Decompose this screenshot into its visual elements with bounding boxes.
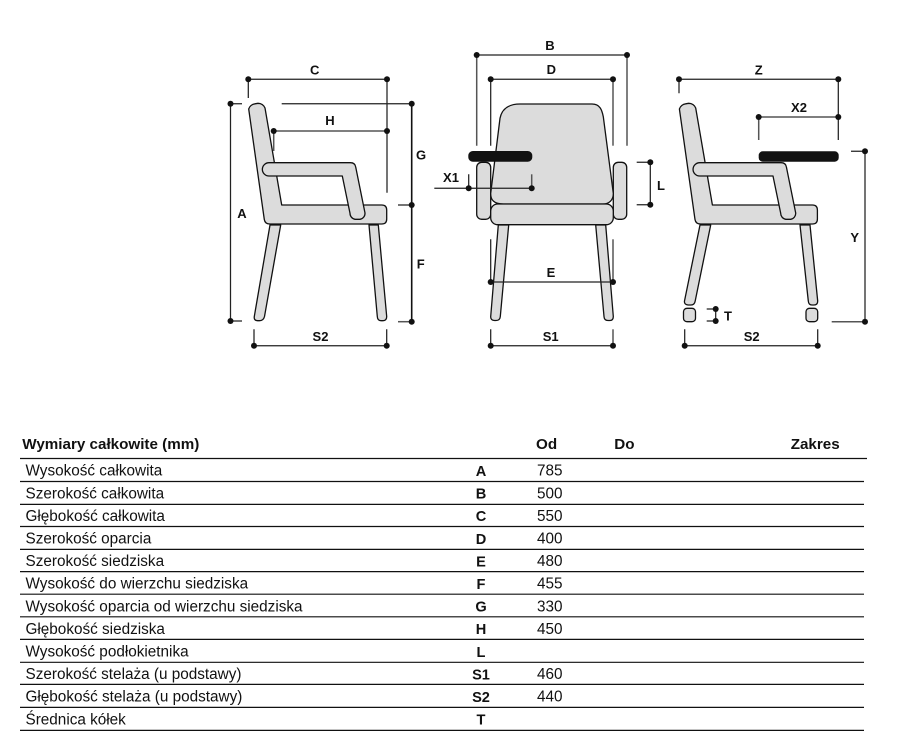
- dimensions G and F: G: [416, 148, 426, 162]
- dimension A: [228, 101, 247, 324]
- dimension Y: Y: [850, 230, 859, 245]
- writing tablet: side view: [759, 151, 839, 162]
- dimension C: [245, 62, 390, 193]
- front view chair diagram: [434, 38, 665, 349]
- row F: F: [477, 577, 486, 593]
- row E: 480: [537, 553, 563, 570]
- table header: Wymiary całkowite (mm): [22, 436, 199, 453]
- dimension B: [474, 38, 630, 146]
- row F: [20, 576, 864, 594]
- row S1: 460: [537, 666, 563, 683]
- row L: Wysokość podłokietnika: [26, 644, 189, 660]
- row A: 785: [537, 463, 563, 480]
- writing tablet: front view: [468, 151, 532, 162]
- dimension S1: [488, 329, 616, 349]
- row E: Szerokość siedziska: [26, 553, 165, 570]
- row B: 500: [537, 485, 563, 502]
- row D: 400: [537, 530, 563, 548]
- row H: H: [476, 622, 486, 638]
- dimension X1: [434, 170, 535, 191]
- row F: Wysokość do wierzchu siedziska: [26, 576, 249, 593]
- dimension S2: [682, 329, 821, 349]
- dimension B: B: [545, 38, 555, 53]
- dimension S1: S1: [543, 329, 559, 344]
- chair: side view: [249, 103, 387, 321]
- row T: T: [477, 713, 486, 729]
- dimension D: D: [547, 62, 556, 77]
- row S2: [20, 689, 864, 707]
- table header: Zakres: [791, 436, 840, 453]
- row G: 330: [537, 598, 563, 615]
- row H: [20, 621, 864, 639]
- dimension L: L: [657, 178, 665, 193]
- row A: [20, 463, 864, 482]
- row D: [20, 530, 864, 549]
- chair: side view with casters: [679, 103, 818, 322]
- dimensions G and F: F: [417, 256, 425, 272]
- row A: A: [476, 464, 487, 480]
- row S2: Głębokość stelaża (u podstawy): [26, 689, 242, 706]
- dimension X1: X1: [443, 170, 459, 185]
- row C: C: [476, 509, 487, 525]
- dimension T: T: [724, 308, 732, 324]
- row G: [20, 598, 864, 617]
- row S2: 440: [537, 689, 563, 706]
- table header: [20, 436, 867, 458]
- dimension X2: X2: [791, 100, 807, 115]
- row T: [20, 710, 864, 730]
- row L: [20, 644, 864, 662]
- chair: front view: [477, 104, 627, 320]
- row A: Wysokość całkowita: [26, 463, 163, 480]
- dimensions table: [20, 436, 867, 730]
- row C: 550: [537, 508, 563, 525]
- dimension E: [488, 239, 616, 285]
- row D: Szerokość oparcia: [26, 530, 152, 548]
- row B: B: [476, 487, 486, 503]
- table header: Do: [614, 436, 635, 453]
- row C: [20, 508, 864, 526]
- dimension T: [707, 306, 732, 324]
- dimension D: [488, 62, 616, 146]
- row F: 455: [537, 576, 563, 593]
- row S1: [20, 666, 864, 684]
- dimension A: A: [237, 206, 247, 221]
- row S1: S1: [472, 667, 490, 683]
- row E: [20, 553, 864, 572]
- dimension X2: [756, 100, 841, 140]
- dimensions G and F: [282, 101, 426, 325]
- row T: Średnica kółek: [26, 710, 126, 728]
- dimension S2: S2: [313, 329, 328, 344]
- side view chair diagram: [228, 62, 426, 349]
- row H: 450: [537, 621, 563, 638]
- dimension S2: S2: [744, 329, 760, 344]
- row L: L: [477, 645, 486, 661]
- dimension H: H: [325, 113, 335, 128]
- dimension H: [271, 113, 390, 151]
- dimension Y: [832, 148, 868, 325]
- row H: Głębokość siedziska: [26, 621, 165, 638]
- dimension C: C: [310, 62, 320, 78]
- dimension S2: [251, 329, 390, 349]
- row G: G: [475, 600, 487, 616]
- row B: [20, 485, 864, 504]
- row G: Wysokość oparcia od wierzchu siedziska: [26, 598, 303, 615]
- dimension Z: Z: [755, 62, 763, 78]
- side view chair with tablet diagram: [676, 62, 868, 349]
- table header: Od: [536, 436, 557, 453]
- row C: Głębokość całkowita: [26, 508, 165, 525]
- dimension Z: [676, 62, 841, 140]
- dimension E: E: [547, 265, 556, 280]
- row E: E: [476, 554, 486, 570]
- row S2: S2: [472, 690, 490, 706]
- dimension L: [637, 159, 665, 208]
- row S1: Szerokość stelaża (u podstawy): [26, 666, 241, 683]
- row B: Szerokość całkowita: [26, 485, 165, 502]
- row D: D: [476, 532, 486, 548]
